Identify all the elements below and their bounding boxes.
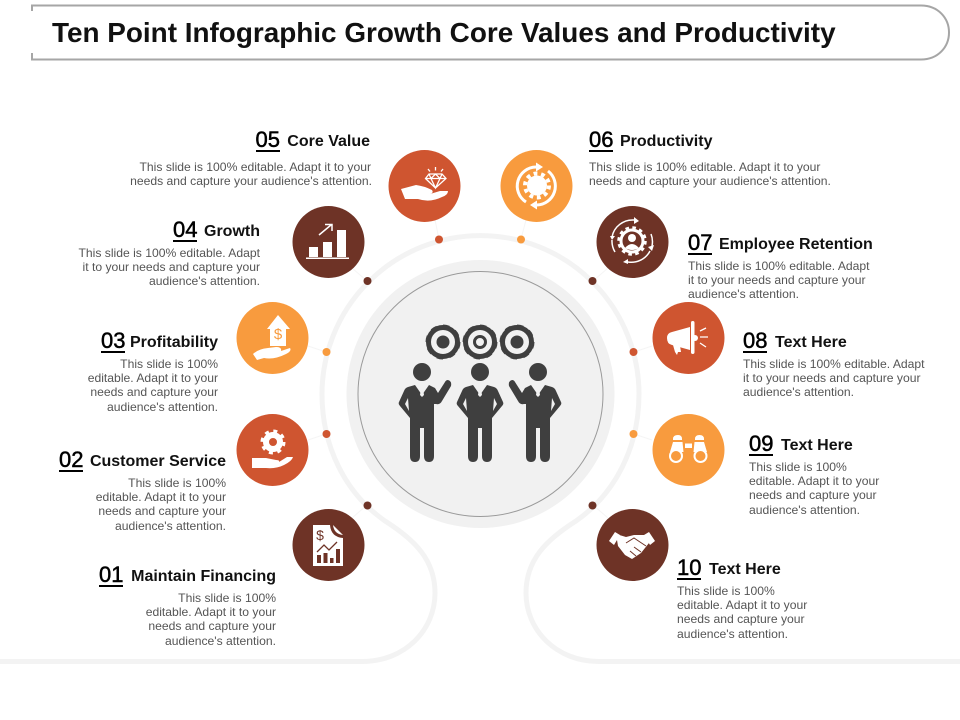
text 10 xyxy=(677,584,807,641)
icon: financial report xyxy=(292,509,364,581)
heading 02: Customer Service xyxy=(90,453,226,470)
title bar xyxy=(32,6,949,60)
heading 05: Core Value xyxy=(287,133,370,150)
heading 08: Text Here xyxy=(775,334,847,351)
text 08: audience's attention. xyxy=(743,385,854,399)
connector dot 06 xyxy=(517,220,526,244)
heading 04 xyxy=(173,217,260,242)
icon: handshake xyxy=(596,509,668,581)
icon: hand with gear xyxy=(236,414,308,486)
text 05: This slide is 100% editable. Adapt it to your xyxy=(140,160,371,174)
text 09: audience's attention. xyxy=(749,503,860,517)
text 04: it to your needs and capture your xyxy=(82,260,260,274)
text 01 xyxy=(146,591,276,648)
text 10: needs and capture your xyxy=(677,612,805,626)
icon: gear with cycle arrows xyxy=(500,150,572,222)
connector dot 08 xyxy=(630,346,652,356)
text 03: needs and capture your xyxy=(90,385,218,399)
text 06 xyxy=(589,160,831,188)
icon: rising bars xyxy=(292,206,364,278)
icon: financial report: $ xyxy=(316,527,324,543)
text 09 xyxy=(749,460,879,517)
heading 01 xyxy=(99,562,276,587)
text 09: needs and capture your xyxy=(749,488,877,502)
text 06: needs and capture your audience's attention. xyxy=(589,174,831,188)
heading 09 xyxy=(749,431,853,456)
heading 06: 06 xyxy=(589,127,613,152)
text 02: editable. Adapt it to your xyxy=(96,490,226,504)
icon: binoculars xyxy=(652,414,724,486)
person middle xyxy=(457,363,503,462)
connector track xyxy=(0,236,960,662)
connector dot 01 xyxy=(352,502,372,518)
heading 03 xyxy=(101,328,218,353)
heading 07: Employee Retention xyxy=(719,236,873,253)
icon: hand and diamond xyxy=(388,150,460,222)
text 04 xyxy=(78,246,261,288)
connector dot 05 xyxy=(435,220,443,244)
heading 03: Profitability xyxy=(130,334,218,351)
text 09: This slide is 100% xyxy=(749,460,847,474)
heading 02 xyxy=(59,447,226,472)
heading 03: 03 xyxy=(101,328,125,353)
item 05: Core Value xyxy=(130,127,460,244)
text 03: This slide is 100% xyxy=(120,357,218,371)
text 02: This slide is 100% xyxy=(128,476,226,490)
gear left xyxy=(428,326,458,358)
heading 05 xyxy=(256,127,370,152)
connector dot 10 xyxy=(588,502,608,518)
person right xyxy=(509,363,561,462)
item 04: Growth xyxy=(78,206,372,288)
connector dot 02 xyxy=(308,430,330,440)
heading 05: 05 xyxy=(256,127,280,152)
icon: megaphone xyxy=(652,302,724,374)
item 03: Profitability xyxy=(88,302,330,414)
heading 10 xyxy=(677,555,781,580)
text 01: audience's attention. xyxy=(165,634,276,648)
text 04: This slide is 100% editable. Adapt xyxy=(78,246,261,260)
text 07: This slide is 100% editable. Adapt xyxy=(688,259,870,273)
text 03: editable. Adapt it to your xyxy=(88,371,218,385)
item 01: Maintain Financing xyxy=(99,502,372,648)
text 03 xyxy=(88,357,218,414)
item 10: Text Here xyxy=(588,502,807,641)
connector dot 04 xyxy=(352,268,372,285)
text 02: audience's attention. xyxy=(115,519,226,533)
text 09: editable. Adapt it to your xyxy=(749,474,879,488)
text 01: needs and capture your xyxy=(148,619,276,633)
heading 09: 09 xyxy=(749,431,773,456)
gear middle xyxy=(464,326,496,358)
text 10: This slide is 100% xyxy=(677,584,775,598)
heading 09: Text Here xyxy=(781,437,853,454)
heading 01: 01 xyxy=(99,562,123,587)
text 02: needs and capture your xyxy=(98,504,226,518)
heading 08 xyxy=(743,328,847,353)
heading 06: Productivity xyxy=(620,133,713,150)
text 07: it to your needs and capture your xyxy=(688,273,866,287)
heading 10: Text Here xyxy=(709,561,781,578)
text 01: This slide is 100% xyxy=(178,591,276,605)
item 08: Text Here xyxy=(630,302,925,399)
item 07: Employee Retention xyxy=(588,206,873,301)
connector dot 09 xyxy=(630,430,652,440)
heading 10: 10 xyxy=(677,555,701,580)
icon: gear person cycle xyxy=(596,206,668,278)
heading 06 xyxy=(589,127,713,152)
text 08: it to your needs and capture your xyxy=(743,371,920,385)
heading 04: 04 xyxy=(173,217,197,242)
icon: hand with dollar arrow xyxy=(236,302,308,374)
text 10: audience's attention. xyxy=(677,627,788,641)
text 08 xyxy=(743,357,925,399)
heading 01: Maintain Financing xyxy=(131,568,276,585)
heading 04: Growth xyxy=(204,223,260,240)
heading 02: 02 xyxy=(59,447,83,472)
item 02: Customer Service xyxy=(59,414,330,533)
item 06: Productivity xyxy=(500,127,831,244)
gear right xyxy=(502,326,532,358)
text 03: audience's attention. xyxy=(107,400,218,414)
text 10: editable. Adapt it to your xyxy=(677,598,807,612)
text 02 xyxy=(96,476,226,533)
text 07 xyxy=(688,259,870,301)
text 05 xyxy=(130,160,372,188)
heading 07 xyxy=(688,230,873,255)
connector dot 07 xyxy=(588,268,608,285)
text 05: needs and capture your audience's attention. xyxy=(130,174,372,188)
text 04: audience's attention. xyxy=(149,274,260,288)
text 07: audience's attention. xyxy=(688,287,799,301)
icon: hand with dollar arrow: $ xyxy=(274,326,283,343)
title: Ten Point Infographic Growth Core Values and Productivity xyxy=(52,17,836,48)
heading 07: 07 xyxy=(688,230,712,255)
heading 08: 08 xyxy=(743,328,767,353)
text 01: editable. Adapt it to your xyxy=(146,605,276,619)
text 06: This slide is 100% editable. Adapt it to your xyxy=(589,160,820,174)
text 08: This slide is 100% editable. Adapt xyxy=(743,357,925,371)
person left xyxy=(399,363,451,462)
central disc xyxy=(346,260,614,528)
connector dot 03 xyxy=(308,346,330,356)
item 09: Text Here xyxy=(630,414,879,517)
icon: team with gears xyxy=(399,326,561,462)
